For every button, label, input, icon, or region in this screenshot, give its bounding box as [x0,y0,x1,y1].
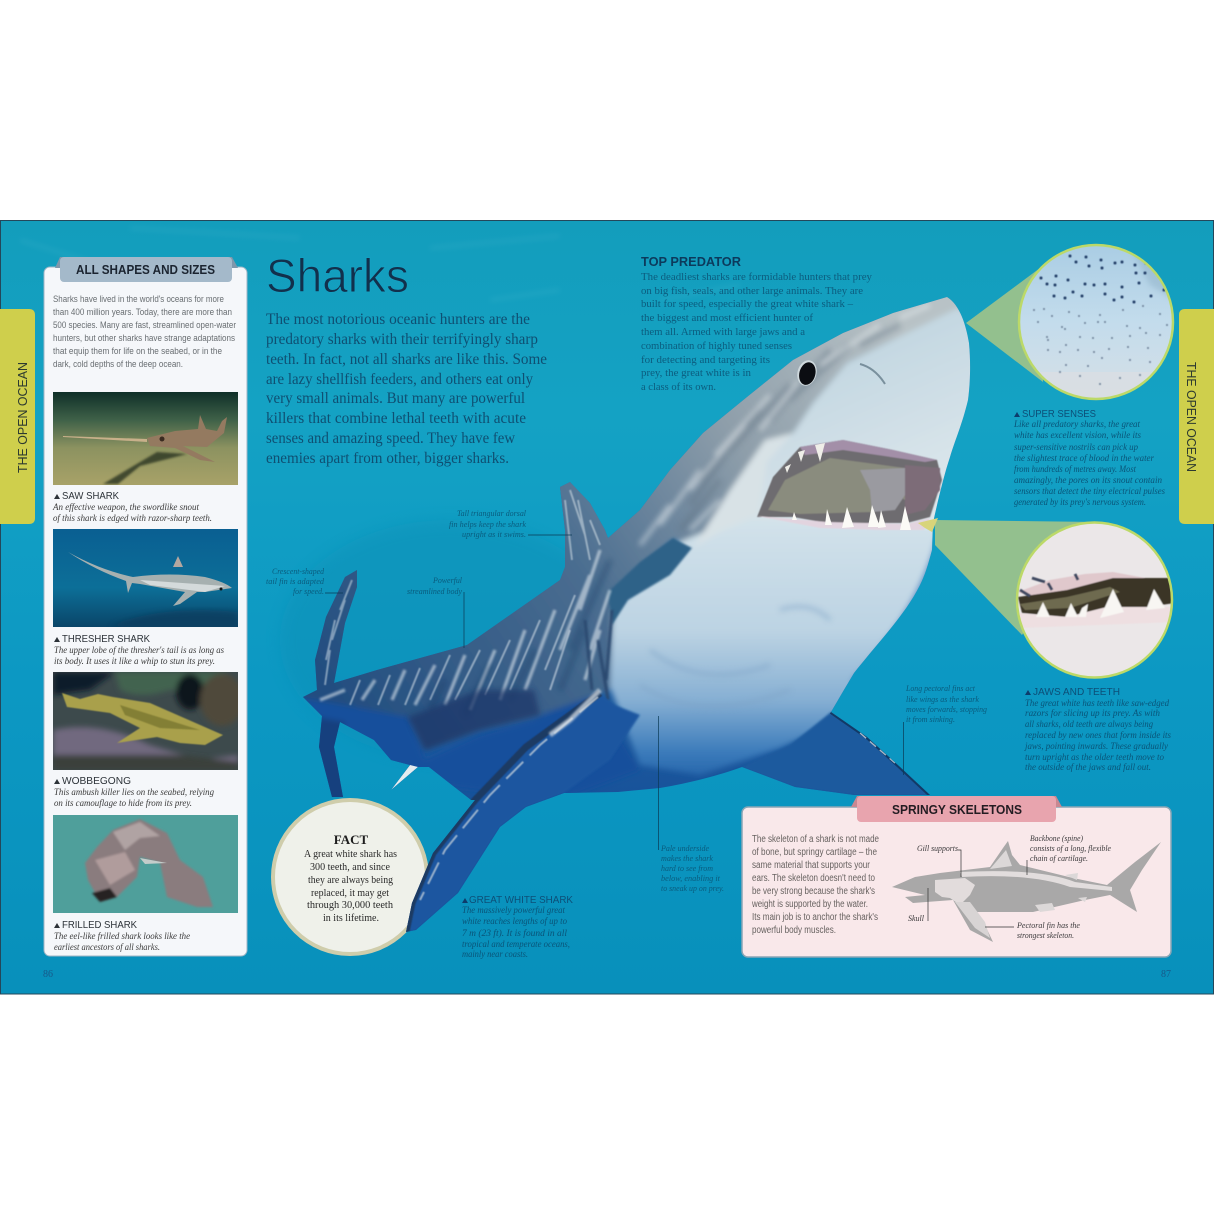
saw shark caption: SAW SHARK [62,490,119,502]
callout: top predator: them all. Armed with large jaws and a [641,327,805,338]
intro paragraph: predatory sharks with their terrifyingly sharp [266,331,538,348]
note: pectoral fins: moves forwards, stopping [906,704,987,714]
callout: top predator: built for speed, especially the great white shark – [641,299,854,310]
wobbegong caption: on its camouflage to hide from its prey. [54,798,192,809]
fact circle: A great white shark has [304,849,397,860]
callout: top predator [641,254,873,393]
note: tail fin: tail fin is adapted [266,576,325,586]
note: dorsal fin: Tall triangular dorsal [457,508,527,518]
skeleton text [751,834,879,936]
panel heading ribbon: SPRINGY SKELETONS [892,802,1022,817]
diagram label: skull [908,888,928,923]
skeleton text: of bone, but springy cartilage – the [752,847,877,858]
shark nostril [860,364,885,384]
skeleton text: be very strong because the shark's [752,886,875,897]
jaw corner [918,518,938,532]
intro paragraph: enemies apart from other, bigger sharks. [266,450,509,467]
skeleton text: powerful body muscles. [752,925,836,936]
diagram label: backbone [1027,833,1111,875]
note: streamlined body [407,575,464,648]
thresher shark caption: THRESHER SHARK [62,633,150,645]
caption: jaws and teeth: The great white has teeth like saw-edged [1025,699,1169,709]
right pectoral fin [780,711,842,750]
note: pale underside: Pale underside [660,843,709,853]
left pectoral fin [406,695,640,932]
caption: jaws and teeth: razors for slicing up its prey. As with [1025,708,1160,719]
saw shark caption [52,490,212,524]
diagram label: gill supports: Gill supports [917,843,959,853]
title: Sharks [266,249,409,302]
skeleton text: weight is supported by the water. [751,899,868,910]
frilled shark caption: FRILLED SHARK [62,919,137,931]
lower tail lobe [319,717,345,797]
fact circle: FACT [334,832,369,847]
dark saddle [408,690,540,750]
caption: great white shark: white reaches lengths of up to [462,916,567,927]
thresher shark caption: The upper lobe of the thresher's tail is as long as [54,645,224,656]
shark skeleton diagram [892,833,1161,942]
page number 86: 86 [43,969,53,980]
caption: great white shark: GREAT WHITE SHARK [469,894,573,906]
note: dorsal fin [449,508,572,539]
caption: super senses: white has excellent vision, while its [1014,431,1141,441]
caption: super senses: SUPER SENSES [1022,408,1096,420]
intro paragraph: senses and amazing speed. They have few [266,430,516,447]
callout: top predator: on big fish, seals, and other large animals. They are [641,286,863,297]
belly [610,510,945,775]
note: pale underside: to sneak up on prey. [661,883,724,893]
panel heading ribbon: ALL SHAPES AND SIZES [76,262,215,277]
tail streaks [325,580,352,685]
caption: super senses: amazingly, the pores on its snout contain [1014,476,1162,486]
diagram label: pectoral fin: Pectoral fin has the [1016,920,1080,930]
intro text: than 400 million years. Today, there are more than [53,307,232,318]
caption: great white shark: tropical and temperate oceans, [462,940,570,950]
note: streamlined body: Powerful [432,575,463,585]
note: dorsal fin: upright as it swims. [462,529,526,539]
panel: springy skeletons [742,796,1171,957]
intro text: hunters, but other sharks have strange adaptations [53,333,235,344]
caption: jaws and teeth: all sharks, old teeth are always being [1025,720,1153,730]
page number 87: 87 [1161,969,1171,980]
photo: frilled shark [53,815,238,913]
intro text: that equip them for life on the seabed, or in the [53,346,222,357]
frilled shark caption: The eel-like frilled shark looks like the [54,931,190,942]
panel heading ribbon [851,796,1062,822]
caption: super senses: super-sensitive nostrils can pick up [1014,443,1138,453]
thresher shark caption [54,633,224,667]
caption: great white shark: mainly near coasts. [462,950,528,960]
caption: super senses: Like all predatory sharks, the great [1013,420,1140,430]
note: pectoral fins: like wings as the shark [906,694,979,704]
caption: jaws and teeth: the outside of the jaws and fall out. [1025,762,1151,773]
magnifier cone: snout [966,268,1043,382]
callout: top predator: a class of its own. [641,382,716,393]
note: pale underside: makes the shark [661,853,713,863]
caption: great white shark: The massively powerful great [462,905,565,916]
caption: jaws and teeth: turn upright as the older teeth move to [1025,753,1164,763]
note: dorsal fin: fin helps keep the shark [449,519,526,529]
wobbegong caption: WOBBEGONG [62,775,131,787]
caption: jaws and teeth: replaced by new ones that form inside its [1025,730,1171,741]
diagram label: skull: Skull [908,913,925,923]
caption: jaws and teeth: jaws, pointing inwards. These gradually [1023,742,1169,752]
note: tail fin [266,566,343,596]
lower teeth [792,505,911,530]
saw shark caption: An effective weapon, the swordlike snout [52,502,199,513]
caption: super senses: from hundreds of metres away. Most [1014,464,1136,475]
left side tab: The Open Ocean: THE OPEN OCEAN [16,362,30,473]
intro paragraph: The most notorious oceanic hunters are the [266,311,530,328]
note: pectoral fins: Long pectoral fins act [905,683,976,693]
diagram label: pectoral fin: strongest skeleton. [1017,930,1074,940]
fact circle: they are always being [308,875,394,886]
caption: super senses [1013,408,1165,508]
shark eye [794,358,820,388]
note: pale underside: below, enabling it [661,873,721,883]
callout: top predator: TOP PREDATOR [641,254,742,269]
frilled shark caption [54,919,190,953]
intro paragraph [266,311,547,467]
fact circle: through 30,000 teeth [307,900,394,911]
skeleton text: same material that supports your [752,860,871,871]
callout: top predator: prey, the great white is in [641,368,752,379]
shark mouth [757,440,942,532]
diagram label: gill supports [917,843,961,877]
callout: top predator: for detecting and targeting its [641,355,770,366]
caption: great white shark: 7 m (23 ft). It is found in all [462,928,567,939]
callout: top predator: the biggest and most efficient hunter of [641,313,814,324]
fact circle [273,800,427,954]
callout: top predator: combination of highly tuned senses [641,341,792,352]
gill patch [608,538,692,625]
upper teeth [785,443,825,473]
fact circle: in its lifetime. [323,913,379,924]
page background: ocean water [0,220,1214,994]
photo: thresher shark [53,529,238,627]
panel: all shapes and sizes [44,257,247,956]
photo: wobbegong [53,672,244,770]
note: pectoral fins: it from sinking. [906,714,955,724]
intro text: dark, cold depths of the deep ocean. [53,359,183,370]
note: tail fin: for speed. [293,586,324,596]
thresher shark caption: its body. It uses it like a whip to stun its prey. [54,657,215,667]
right side tab: The Open Ocean [1179,309,1214,524]
fact circle: replaced, it may get [311,888,389,899]
belly creases [650,603,831,672]
pelvic spike [391,765,418,790]
wobbegong caption [54,775,214,809]
intro paragraph: very small animals. But many are powerful [266,390,525,407]
diagram label: pectoral fin [985,920,1080,940]
intro paragraph: teeth. In fact, not all sharks are like this. Some [266,351,547,368]
caption: jaws and teeth: JAWS AND TEETH [1033,686,1120,698]
rear underside dark blue [304,698,626,798]
right side tab: The Open Ocean: THE OPEN OCEAN [1184,362,1198,472]
magnifier circle: jaws and teeth [1017,522,1175,678]
saw shark caption: of this shark is edged with razor-sharp teeth. [53,513,212,524]
caption: jaws and teeth [1023,686,1171,773]
head marks [680,325,900,530]
caption: super senses: sensors that detect the tiny electrical pulses [1014,487,1165,497]
dorsal fin streaks [565,490,600,560]
callout: top predator: The deadliest sharks are formidable hunters that prey [641,272,873,283]
intro text: Sharks have lived in the world's oceans for more [53,294,224,305]
skeleton text: ears. The skeleton doesn't need to [752,873,875,884]
left side tab: The Open Ocean [0,309,35,524]
caption: super senses: generated by its prey's nervous system. [1014,498,1146,508]
magnifier cone: jaws [935,520,1100,635]
note: pale underside: hard to see from [661,863,713,873]
back and head colouring [295,285,975,750]
diagram label: backbone: Backbone (spine) [1030,833,1083,843]
right edge of belly [850,540,932,680]
white streaks on back [320,550,610,710]
skeleton text: The skeleton of a shark is not made [752,834,879,845]
intro text [53,294,237,370]
intro paragraph: killers that combine lethal teeth with acute [266,410,526,427]
intro paragraph: are lazy shellfish feeders, and others eat only [266,371,533,388]
note: streamlined body: streamlined body [407,586,462,596]
magnifier circle: skin pores [1019,245,1175,402]
diagram label: backbone: consists of a long, flexible [1030,843,1111,853]
intro text: 500 species. Many are fast, streamlined open-water [53,320,237,331]
photo: saw shark [53,392,238,485]
caption: super senses: the slightest trace of blood in the water [1014,453,1154,464]
caption: great white shark [462,894,573,960]
diagram label: backbone: chain of cartilage. [1030,853,1088,863]
great white shark illustration [295,285,985,940]
fact circle: 300 teeth, and since [310,862,390,873]
panel heading ribbon [55,257,238,282]
skeleton text: Its main job is to anchor the shark's [752,912,878,923]
note: pectoral fins [904,683,987,775]
gill slits [585,610,612,700]
wobbegong caption: This ambush killer lies on the seabed, relying [54,788,214,798]
frilled shark caption: earliest ancestors of all sharks. [54,942,160,953]
cheek spur [701,431,793,538]
note: tail fin: Crescent-shaped [272,566,325,576]
note: pale underside [658,716,724,893]
face [755,308,970,520]
